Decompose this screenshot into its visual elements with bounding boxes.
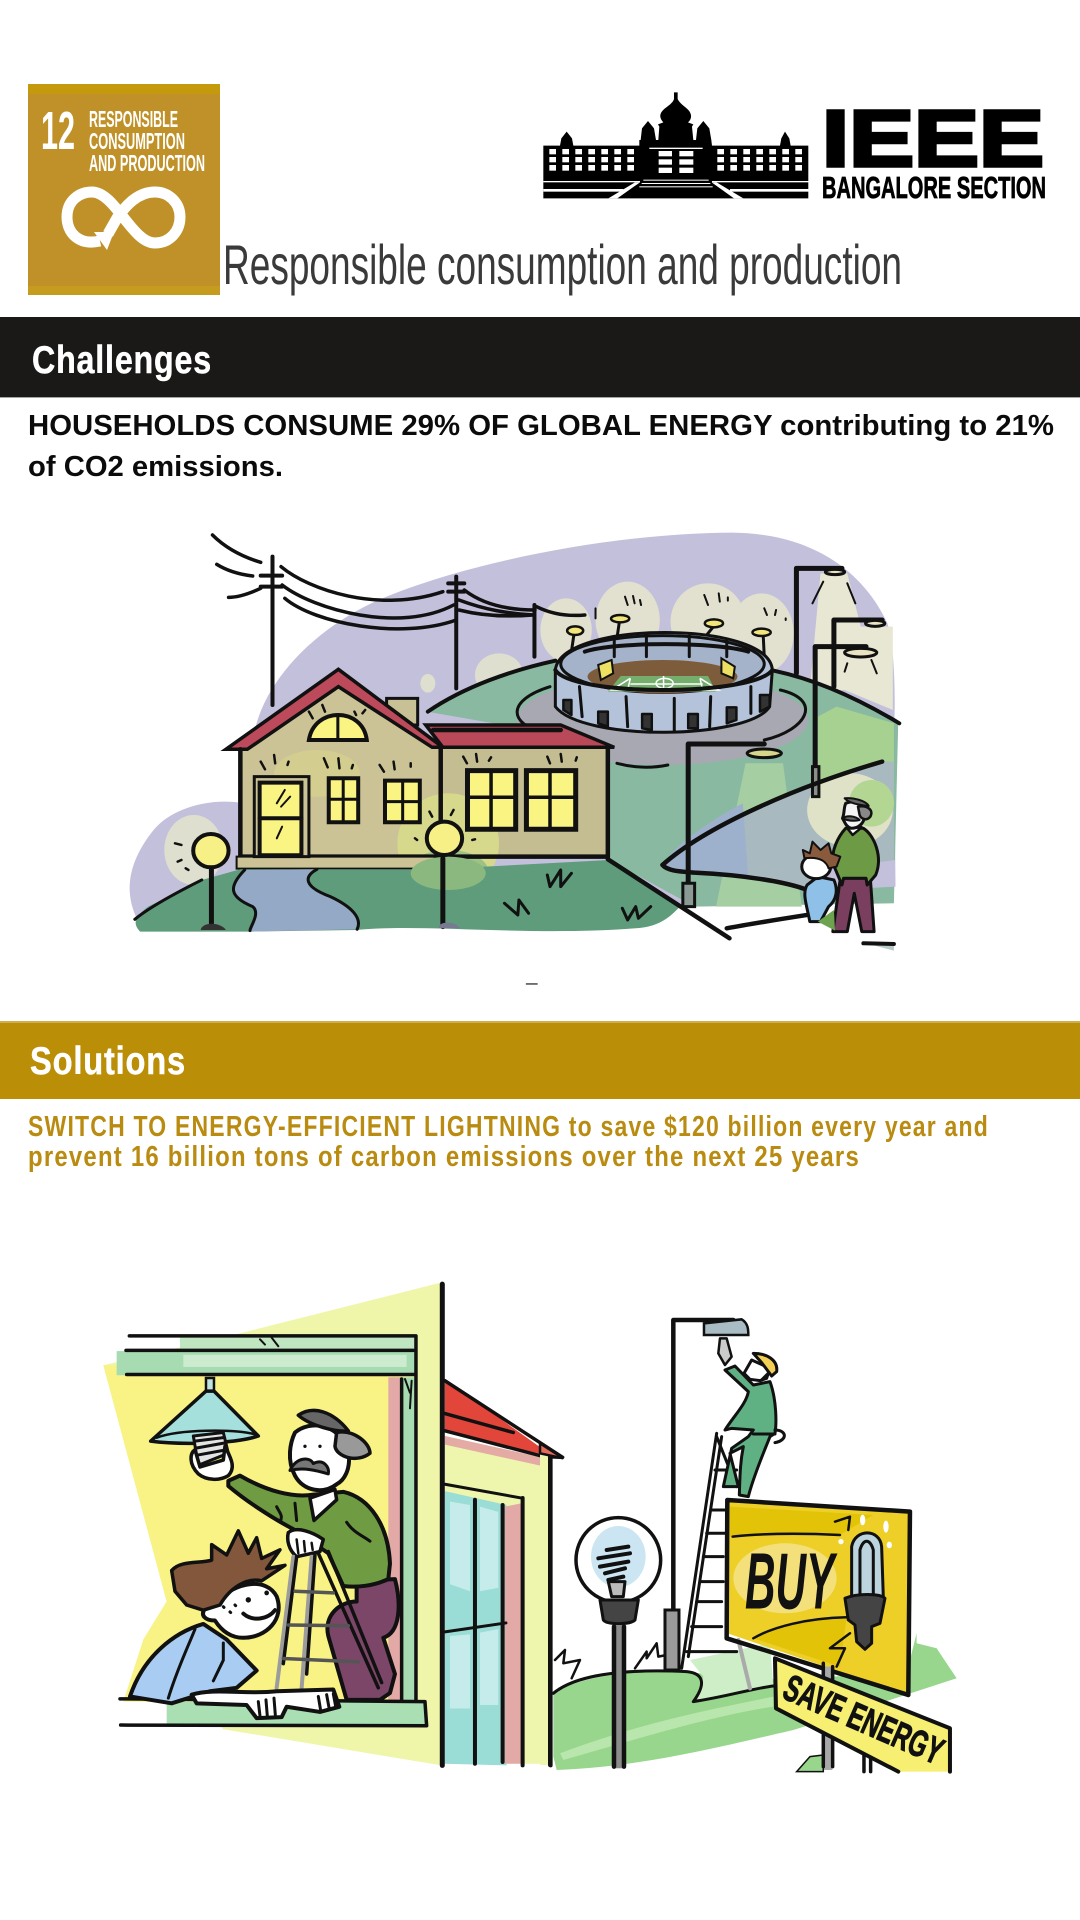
- panel: solutions header: Solutions: [30, 1040, 186, 1083]
- challenge statement: HOUSEHOLDS CONSUME 29% OF GLOBAL ENERGY contributing to 21%: [28, 410, 1054, 442]
- hill outlines: [428, 661, 899, 723]
- challenge statement: [28, 410, 1054, 483]
- challenge statement: of CO2 emissions.: [28, 451, 283, 483]
- IEEE wordmark: IEEE: [822, 94, 1044, 183]
- panel: challenges header: Challenges: [32, 339, 212, 382]
- BUY lettering: BUY: [745, 1536, 838, 1625]
- illustration: energy-consuming house and stadium at night: [130, 533, 899, 985]
- solution statement: prevent 16 billion tons of carbon emissions over the next 25 years: [28, 1141, 860, 1173]
- lamp posts: [175, 810, 475, 930]
- grass: [553, 1633, 957, 1770]
- panel: challenges header: [0, 317, 1080, 398]
- utility poles and wires: [212, 535, 585, 705]
- window frame: [117, 1336, 427, 1726]
- house wall and roof: [442, 1284, 563, 1765]
- illustration: worker on ladder, street lights and save energy signs: [540, 1319, 957, 1772]
- lawn: [136, 860, 681, 932]
- light wash on the wall: [103, 1282, 442, 1765]
- step ladder: [277, 1552, 382, 1688]
- lit windows: [254, 715, 576, 857]
- house: [226, 669, 614, 893]
- panel: solutions header: [0, 1021, 1080, 1099]
- background sky blobs: [130, 533, 896, 930]
- hanging lamp shade: [151, 1378, 258, 1443]
- solution statement: [28, 1111, 989, 1173]
- icon: SDG 12 badge: CONSUMPTION: [89, 128, 185, 154]
- icon: SDG 12 badge: RESPONSIBLE: [89, 106, 178, 132]
- logo: IEEE Bangalore Section: [543, 92, 1046, 205]
- boy at the sill: [130, 1531, 339, 1718]
- icon: CFL bulb: [838, 1515, 892, 1649]
- worker in green overalls: [718, 1338, 784, 1497]
- green hill: [427, 660, 898, 907]
- save energy sign: [775, 1658, 950, 1772]
- ladder: [682, 1433, 737, 1668]
- globe lamp with spiral bulb: [576, 1518, 661, 1768]
- stadium plaza: [517, 675, 808, 765]
- icon: palace silhouette: [543, 92, 810, 198]
- wall edge and roof tip: [540, 1453, 563, 1765]
- street light pole: [665, 1319, 748, 1670]
- icon: SDG 12 badge: AND PRODUCTION: [89, 150, 205, 176]
- stadium: [555, 593, 786, 732]
- man and child looking on: [802, 798, 878, 932]
- save energy lettering: SAVE ENERGY: [777, 1666, 950, 1772]
- illustration: father and son changing a bulb at the window: [103, 1282, 563, 1765]
- road edge lines: [662, 762, 882, 928]
- winding road: [662, 762, 894, 890]
- father on the ladder: [191, 1410, 399, 1700]
- billboard: [727, 1500, 910, 1695]
- street lights: [683, 568, 885, 907]
- icon: SDG 12 badge: 12: [41, 101, 75, 161]
- icon: SDG 12 badge: [28, 84, 220, 295]
